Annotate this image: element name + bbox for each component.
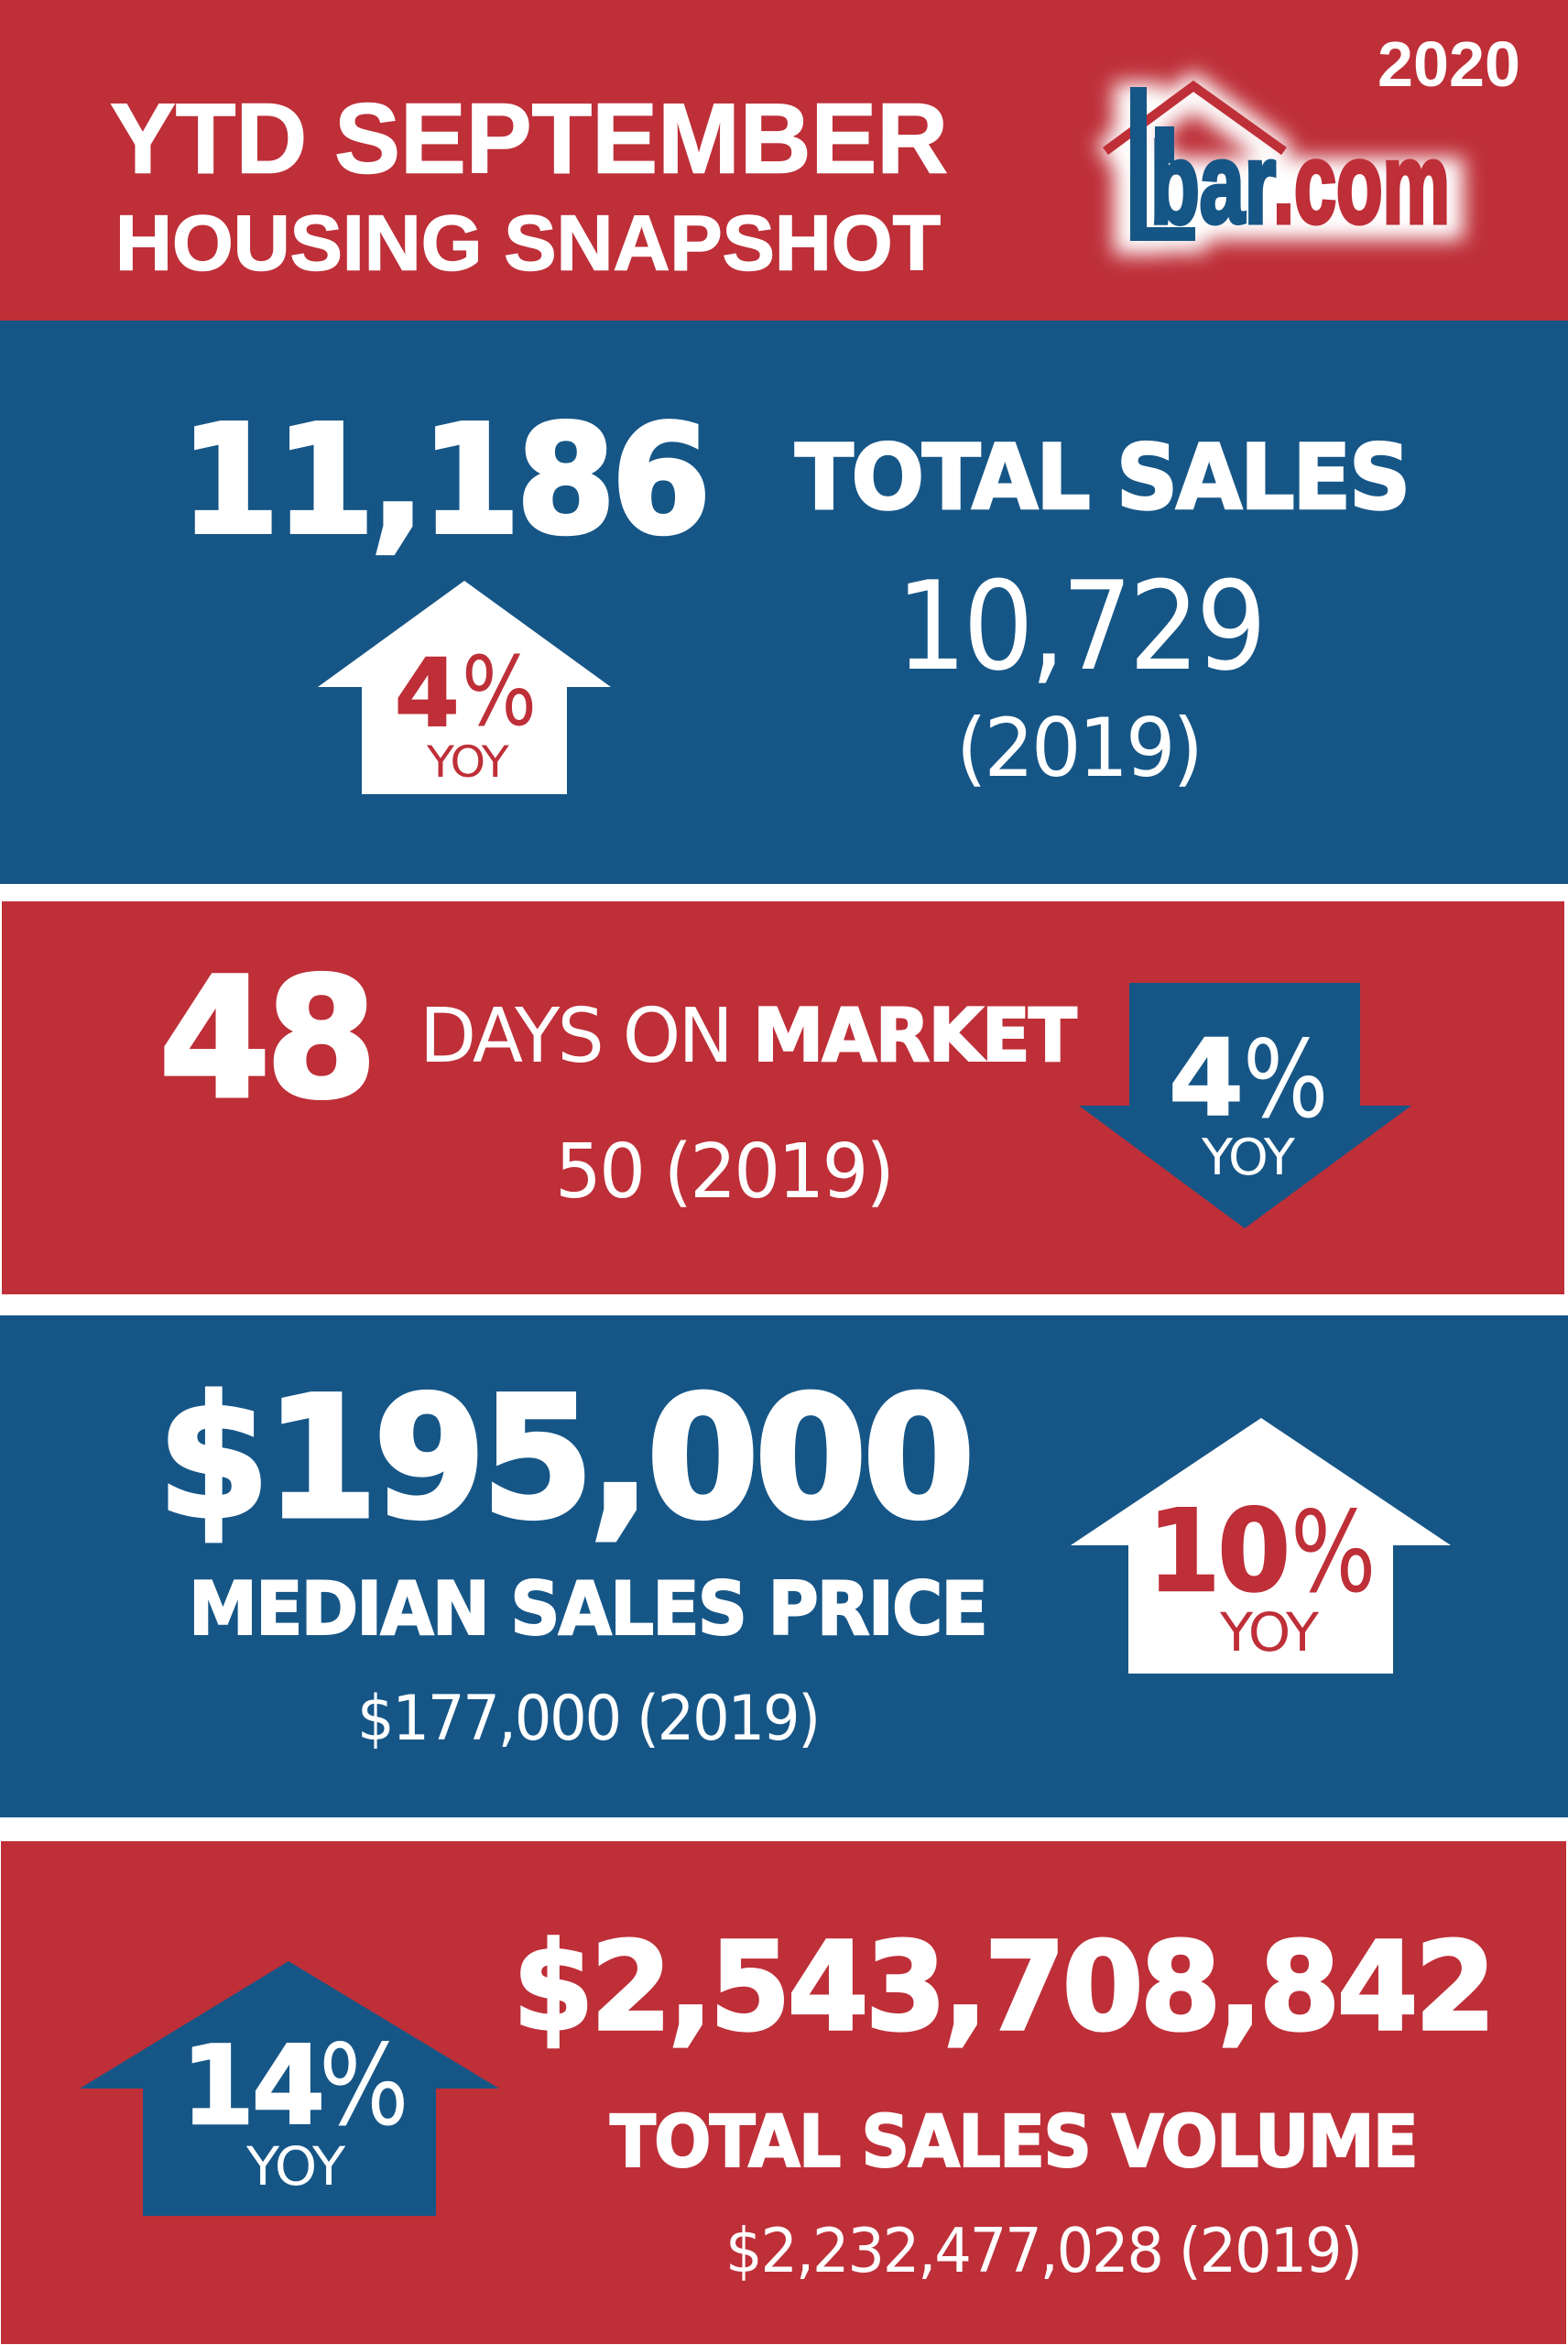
sales volume value: $2,543,708,842 <box>513 1917 1493 2058</box>
sales volume label: TOTAL SALES VOLUME <box>610 2101 1417 2184</box>
arrow: up 10% YOY <box>1071 1418 1451 1674</box>
logo: Lbar.com <box>1105 82 1464 255</box>
subtitle: Housing Snapshot: HOUSING SNAPSHOT <box>115 200 941 288</box>
arrow: up 4% YOY: % <box>462 636 534 747</box>
arrow: up 14% YOY: 14 <box>181 2023 322 2150</box>
arrow: up 4% YOY: YOY <box>426 737 509 788</box>
panel: days on market <box>2 901 1564 1294</box>
median price value: $195,000 <box>158 1361 971 1556</box>
arrow: down 4% YOY: YOY <box>1201 1129 1296 1186</box>
panel: header <box>0 0 1568 321</box>
prior-year label: (2019) <box>956 701 1201 795</box>
arrow: down 4% YOY <box>1079 983 1411 1228</box>
arrow: up 14% YOY: % <box>319 2021 406 2151</box>
total sales label: TOTAL SALES <box>795 426 1409 530</box>
days on market value: 48 <box>159 943 373 1135</box>
title: YTD September: YTD SEPTEMBER <box>110 82 948 194</box>
arrow: up 10% YOY: 10 <box>1148 1487 1288 1618</box>
arrow: up 4% YOY: 4 <box>395 639 457 748</box>
prior-year days on market: 50 (2019) <box>555 1129 892 1216</box>
days on market label: DAYS ON <box>419 993 731 1080</box>
panel: total sales volume <box>1 1841 1566 2344</box>
logo: Lbar.com: .com <box>1273 121 1450 247</box>
arrow: up 14% YOY <box>80 1961 499 2216</box>
prior-year sales volume: $2,232,477,028 (2019) <box>725 2215 1361 2286</box>
days on market label <box>419 993 1077 1080</box>
total sales value: 11,186 <box>180 394 707 568</box>
year label: 2020 <box>1377 28 1520 100</box>
arrow: up 10% YOY: YOY <box>1219 1601 1320 1663</box>
arrow: up 4% YOY <box>318 581 611 794</box>
prior-year value: 10,729 <box>896 555 1263 698</box>
median price label: MEDIAN SALES PRICE <box>189 1566 986 1652</box>
prior-year median price: $177,000 (2019) <box>357 1683 819 1755</box>
arrow: down 4% YOY: 4 <box>1169 1018 1241 1140</box>
arrow: down 4% YOY: % <box>1243 1017 1325 1142</box>
arrow: up 10% YOY: % <box>1290 1488 1373 1618</box>
arrow: up 14% YOY: YOY <box>245 2135 346 2198</box>
panel: median sales price <box>0 1315 1568 1817</box>
days on market label: MARKET <box>753 993 1077 1078</box>
logo: Lbar.com: bar <box>1150 121 1276 247</box>
panel: total sales <box>0 321 1568 884</box>
